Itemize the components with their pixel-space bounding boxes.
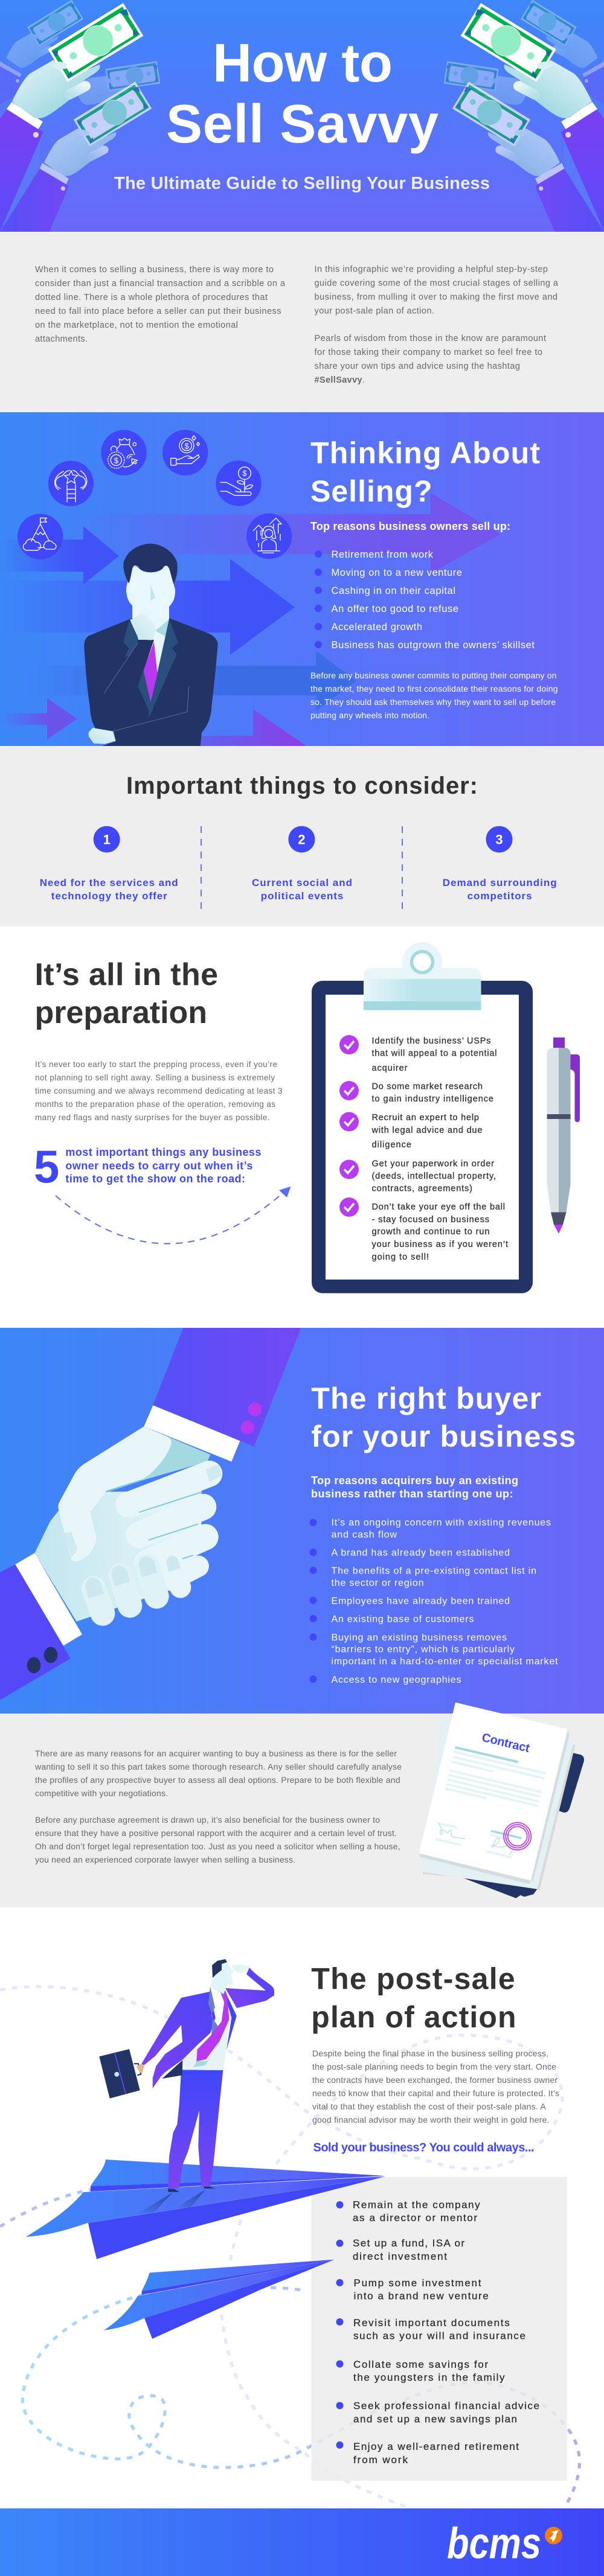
paragraphs: competitive with your negotiations. — [35, 1788, 168, 1798]
checklist text: Don’t take your eye off the ball — [372, 1202, 505, 1212]
subheading: Sold your business? You could always... — [313, 2141, 534, 2155]
heading — [311, 1382, 576, 1453]
item 3 — [443, 826, 557, 902]
checklist text: Do some market research — [372, 1082, 483, 1092]
paragraphs: the profiles of any prospective buyer to assess all deal options. Prepare to be both flexible and — [35, 1775, 400, 1785]
item 1: technology they offer — [51, 890, 167, 902]
paragraphs: you need an experienced corporate lawyer when selling a business. — [35, 1855, 295, 1864]
list: reasons to buy: It’s an ongoing concern with existing revenues — [331, 1517, 551, 1528]
icon: woman with growth arrows — [246, 514, 292, 559]
paragraph: so. They should ask themselves why they want to sell up before — [310, 697, 556, 707]
panel: options list background — [311, 2177, 567, 2481]
list: post-sale options: Pump some investment — [354, 2277, 481, 2289]
paragraph: needs to know that their capital and their future is protected. It’s — [312, 2088, 559, 2098]
list: post-sale options: from work — [353, 2454, 408, 2466]
intro text left column — [35, 265, 286, 344]
list: post-sale options: as a director or mentor — [353, 2212, 477, 2224]
clipboard — [312, 942, 533, 1293]
intro text right column: business, from mulling it over to making the first move and — [314, 292, 557, 302]
list: post-sale options: and set up a new savings plan — [353, 2413, 517, 2425]
callout: 5 most important things: 5 — [34, 1142, 59, 1193]
heading: The right buyer — [311, 1382, 541, 1415]
checklist text: to gain industry intelligence — [372, 1094, 493, 1104]
item 1 — [40, 826, 178, 902]
item 3: Demand surrounding — [443, 877, 557, 888]
intro text right column: your post-sale plan of action. — [314, 307, 434, 316]
paragraph: the market, they need to first consolidate their reasons for doing — [310, 684, 558, 693]
intro text right column: guide covering some of the most crucial stages of selling a — [314, 279, 559, 289]
check icons — [339, 1035, 359, 1217]
icon: money plant in hand — [216, 461, 262, 506]
paragraph: Despite being the final phase in the business selling process, — [312, 2048, 548, 2058]
intro text left column: attachments. — [35, 334, 88, 344]
list: reasons to buy: Access to new geographies — [331, 1675, 461, 1685]
callout: 5 most important things: owner needs to carry out when it’s — [65, 1160, 252, 1172]
list: reasons to buy: Employees have already been trained — [331, 1596, 510, 1607]
list: reasons to sell: Accelerated growth — [331, 622, 422, 633]
list: post-sale options: Set up a fund, ISA or — [353, 2237, 464, 2249]
heading: preparation — [35, 995, 207, 1030]
title — [166, 33, 439, 155]
paragraph: time consuming and we always recommend dedicating at least 3 — [35, 1086, 283, 1095]
checklist text: acquirer — [372, 1063, 408, 1073]
briefcase — [99, 2049, 144, 2099]
panel: introduction — [0, 232, 604, 412]
panel: acquirer research — [0, 1703, 604, 1907]
contract label: Contract — [480, 1731, 531, 1755]
item 2: Current social and — [252, 877, 352, 888]
checklist text: Recruit an expert to help — [372, 1113, 479, 1123]
illustration: businessman with briefcase — [99, 1959, 274, 2214]
checklist text: going to sell! — [372, 1252, 429, 1262]
list: reasons to sell: Business has outgrown the owners’ skillset — [331, 640, 535, 651]
heading — [311, 1962, 516, 2034]
hero panel — [0, 0, 604, 232]
list: reasons to sell: An offer too good to refuse — [331, 604, 458, 614]
shoe shadows — [136, 2190, 205, 2214]
heading: Thinking About — [310, 436, 540, 470]
paragraph — [310, 671, 558, 720]
intro text right column: In this infographic we’re providing a helpful step-by-step — [314, 264, 548, 274]
subtitle: The Ultimate Guide to Selling Your Business — [114, 174, 490, 193]
list: reasons to buy: Buying an existing business removes — [331, 1633, 507, 1643]
clip — [364, 942, 481, 1010]
paragraph: months to the preparation phase of the operation, removing as — [35, 1100, 275, 1109]
list: reasons to buy — [309, 1517, 558, 1685]
intro text right column — [314, 264, 559, 385]
paragraph: the post-sale planning needs to begin from the very start. Once — [312, 2062, 556, 2071]
paragraphs: Before any purchase agreement is drawn up, it’s also beneficial for the business owner to — [35, 1815, 380, 1825]
panel: thinking about selling — [0, 412, 604, 747]
icon: star and ladder — [48, 461, 94, 506]
subheading: business rather than starting one up: — [311, 1488, 513, 1500]
checklist text: with legal advice and due — [371, 1126, 482, 1135]
heading: Important things to consider: — [126, 773, 478, 799]
title: How to — [213, 33, 393, 94]
list: post-sale options: Revisit important documents — [353, 2317, 510, 2329]
icon: money plant in hand: $ — [242, 470, 246, 478]
list: reasons to sell: Retirement from work — [331, 549, 434, 560]
panel: preparation — [34, 942, 580, 1293]
paragraphs: There are as many reasons for an acquirer wanting to buy a business as there is for the seller — [35, 1749, 397, 1758]
paragraph — [312, 2048, 559, 2125]
paragraph: Before any business owner commits to putting their company on — [310, 671, 557, 680]
heading: plan of action — [311, 2000, 516, 2034]
illustration: hands holding money, left — [0, 0, 168, 232]
callout: 5 most important things: most important things any business — [65, 1146, 261, 1158]
arrow: dashed curve to clipboard — [56, 1187, 291, 1244]
paragraph: many red flags and nasty surprises for the buyer as possible. — [35, 1113, 269, 1122]
illustration: paper plane large — [26, 2160, 385, 2259]
panel: the right buyer — [0, 1328, 604, 1714]
paragraphs — [34, 1749, 402, 1864]
intro text left column: on the marketplace, not to mention the emotional — [35, 320, 238, 330]
icon: hand holding coin — [162, 430, 208, 476]
icon: pen — [547, 1038, 580, 1234]
heading: It’s all in the — [35, 957, 218, 992]
heading — [35, 957, 218, 1030]
illustration: hands holding money, right — [436, 0, 604, 232]
intro text left column: dotted line. There is a whole plethora of procedures that — [35, 293, 268, 302]
checklist text: growth and continue to run — [372, 1227, 489, 1237]
heading: The post-sale — [311, 1962, 515, 1996]
list: post-sale options: Remain at the company — [353, 2199, 480, 2211]
checklist text: Get your paperwork in order — [372, 1159, 494, 1169]
list: reasons to buy: important in a hard-to-enter or specialist market — [331, 1657, 558, 1667]
illustration: paper plane small — [104, 2260, 335, 2339]
paragraphs: ensure that they have a positive personal rapport with the acquirer and a certain level of trust. — [35, 1828, 397, 1838]
list: reasons to buy: An existing base of customers — [331, 1615, 474, 1625]
illustration: handshake — [0, 1328, 301, 1700]
list: reasons to buy: the sector or region — [331, 1578, 424, 1588]
intro text right column: #SellSavvy. — [314, 375, 365, 385]
heading: for your business — [311, 1420, 576, 1453]
item 3: 3 — [495, 832, 503, 847]
checklist text: diligence — [372, 1140, 411, 1150]
list: reasons to buy: The benefits of a pre-existing contact list in — [331, 1566, 536, 1577]
logo: bcms: bcms — [447, 2520, 541, 2568]
checklist text — [371, 1036, 508, 1262]
paragraphs: Oh and don’t forget legal representation too. Just as you need a solicitor when selling a house, — [35, 1841, 400, 1851]
checklist text: your business as if you weren’t — [372, 1240, 508, 1249]
item 3: competitors — [467, 890, 532, 902]
list: post-sale options — [336, 2199, 539, 2466]
paragraph: vital to that they establish the cost of their post-sale plans. A — [312, 2102, 546, 2111]
list: reasons to buy: “barriers to entry”, which is particularly — [331, 1645, 515, 1655]
icon: hand holding coin: $ — [184, 441, 189, 450]
list: post-sale options: direct investment — [353, 2251, 447, 2262]
paragraph: the contracts have been exchanged, the former business owner — [312, 2075, 557, 2085]
intro text left column: need to fall into place before a seller can put their business — [35, 307, 281, 316]
intro text left column: consider than just a financial transaction and a scribble on a — [35, 279, 286, 289]
panel: post-sale plan — [0, 1959, 579, 2508]
callout: 5 most important things: time to get the show on the road: — [65, 1173, 245, 1185]
list: post-sale options: Collate some savings for — [353, 2359, 488, 2370]
checklist text: (deeds, intellectual property, — [372, 1172, 496, 1181]
paragraph: good financial advisor may be worth their weight in gold here. — [312, 2115, 549, 2125]
list: reasons to buy: A brand has already been established — [331, 1548, 510, 1558]
list: post-sale options: into a brand new venture — [354, 2291, 489, 2302]
subheading: Top reasons acquirers buy an existing — [311, 1475, 518, 1487]
illustration: thinking businessman — [84, 544, 218, 747]
list: reasons to sell — [315, 549, 535, 651]
dashed dividers — [201, 826, 402, 910]
icon: mountain flag — [18, 514, 63, 560]
icon: money bag — [101, 430, 147, 476]
checklist text: - stay focused on business — [372, 1215, 489, 1225]
heading: Selling? — [310, 474, 432, 508]
paragraph: putting any wheels into motion. — [310, 710, 429, 720]
illustration: contract — [419, 1703, 584, 1898]
item 1: Need for the services and — [40, 877, 178, 888]
paragraph — [35, 1060, 283, 1122]
paragraph: not planning to sell right away. Selling a business is extremely — [35, 1073, 275, 1082]
checklist text: contracts, agreements) — [372, 1184, 472, 1194]
item 2 — [252, 826, 352, 902]
list: reasons to buy: and cash flow — [331, 1529, 397, 1540]
footer — [0, 2508, 604, 2576]
subheading — [311, 1475, 518, 1500]
heading — [310, 436, 540, 508]
dashed flight trails — [0, 1986, 579, 2508]
callout: 5 most important things — [34, 1142, 261, 1193]
intro text right column: Pearls of wisdom from those in the know are paramount — [314, 334, 546, 343]
list: post-sale options: such as your will and insurance — [353, 2330, 525, 2342]
intro text right column: for those taking their company to market so feel free to — [314, 348, 542, 357]
paragraphs: wanting to sell it so this part takes some thorough research. Any seller should carefully analyse — [34, 1762, 402, 1771]
item 2: political events — [261, 890, 343, 902]
checklist text: Identify the business’ USPs — [372, 1036, 490, 1046]
list: post-sale options: the youngsters in the family — [353, 2372, 505, 2383]
checklist text: that will appeal to a potential — [372, 1049, 496, 1059]
list: post-sale options: Seek professional financial advice — [353, 2400, 539, 2412]
item 1: 1 — [103, 832, 111, 847]
list: reasons to sell: Cashing in on their capital — [331, 585, 455, 596]
intro text right column: share your own tips and advice using the hashtag — [314, 362, 520, 371]
icon: money bag: $ — [114, 456, 119, 465]
list: post-sale options: Enjoy a well-earned retirement — [353, 2441, 519, 2452]
paragraph: It’s never too early to start the prepping process, even if you’re — [35, 1060, 277, 1069]
list: reasons to sell: Moving on to a new venture — [331, 567, 462, 578]
subheading: Top reasons business owners sell up: — [310, 520, 510, 532]
background arrows — [0, 493, 501, 746]
item 2: 2 — [298, 832, 306, 847]
intro text left column: When it comes to selling a business, there is way more to — [35, 265, 274, 275]
title: Sell Savvy — [166, 94, 439, 155]
panel: important things to consider — [0, 746, 604, 926]
